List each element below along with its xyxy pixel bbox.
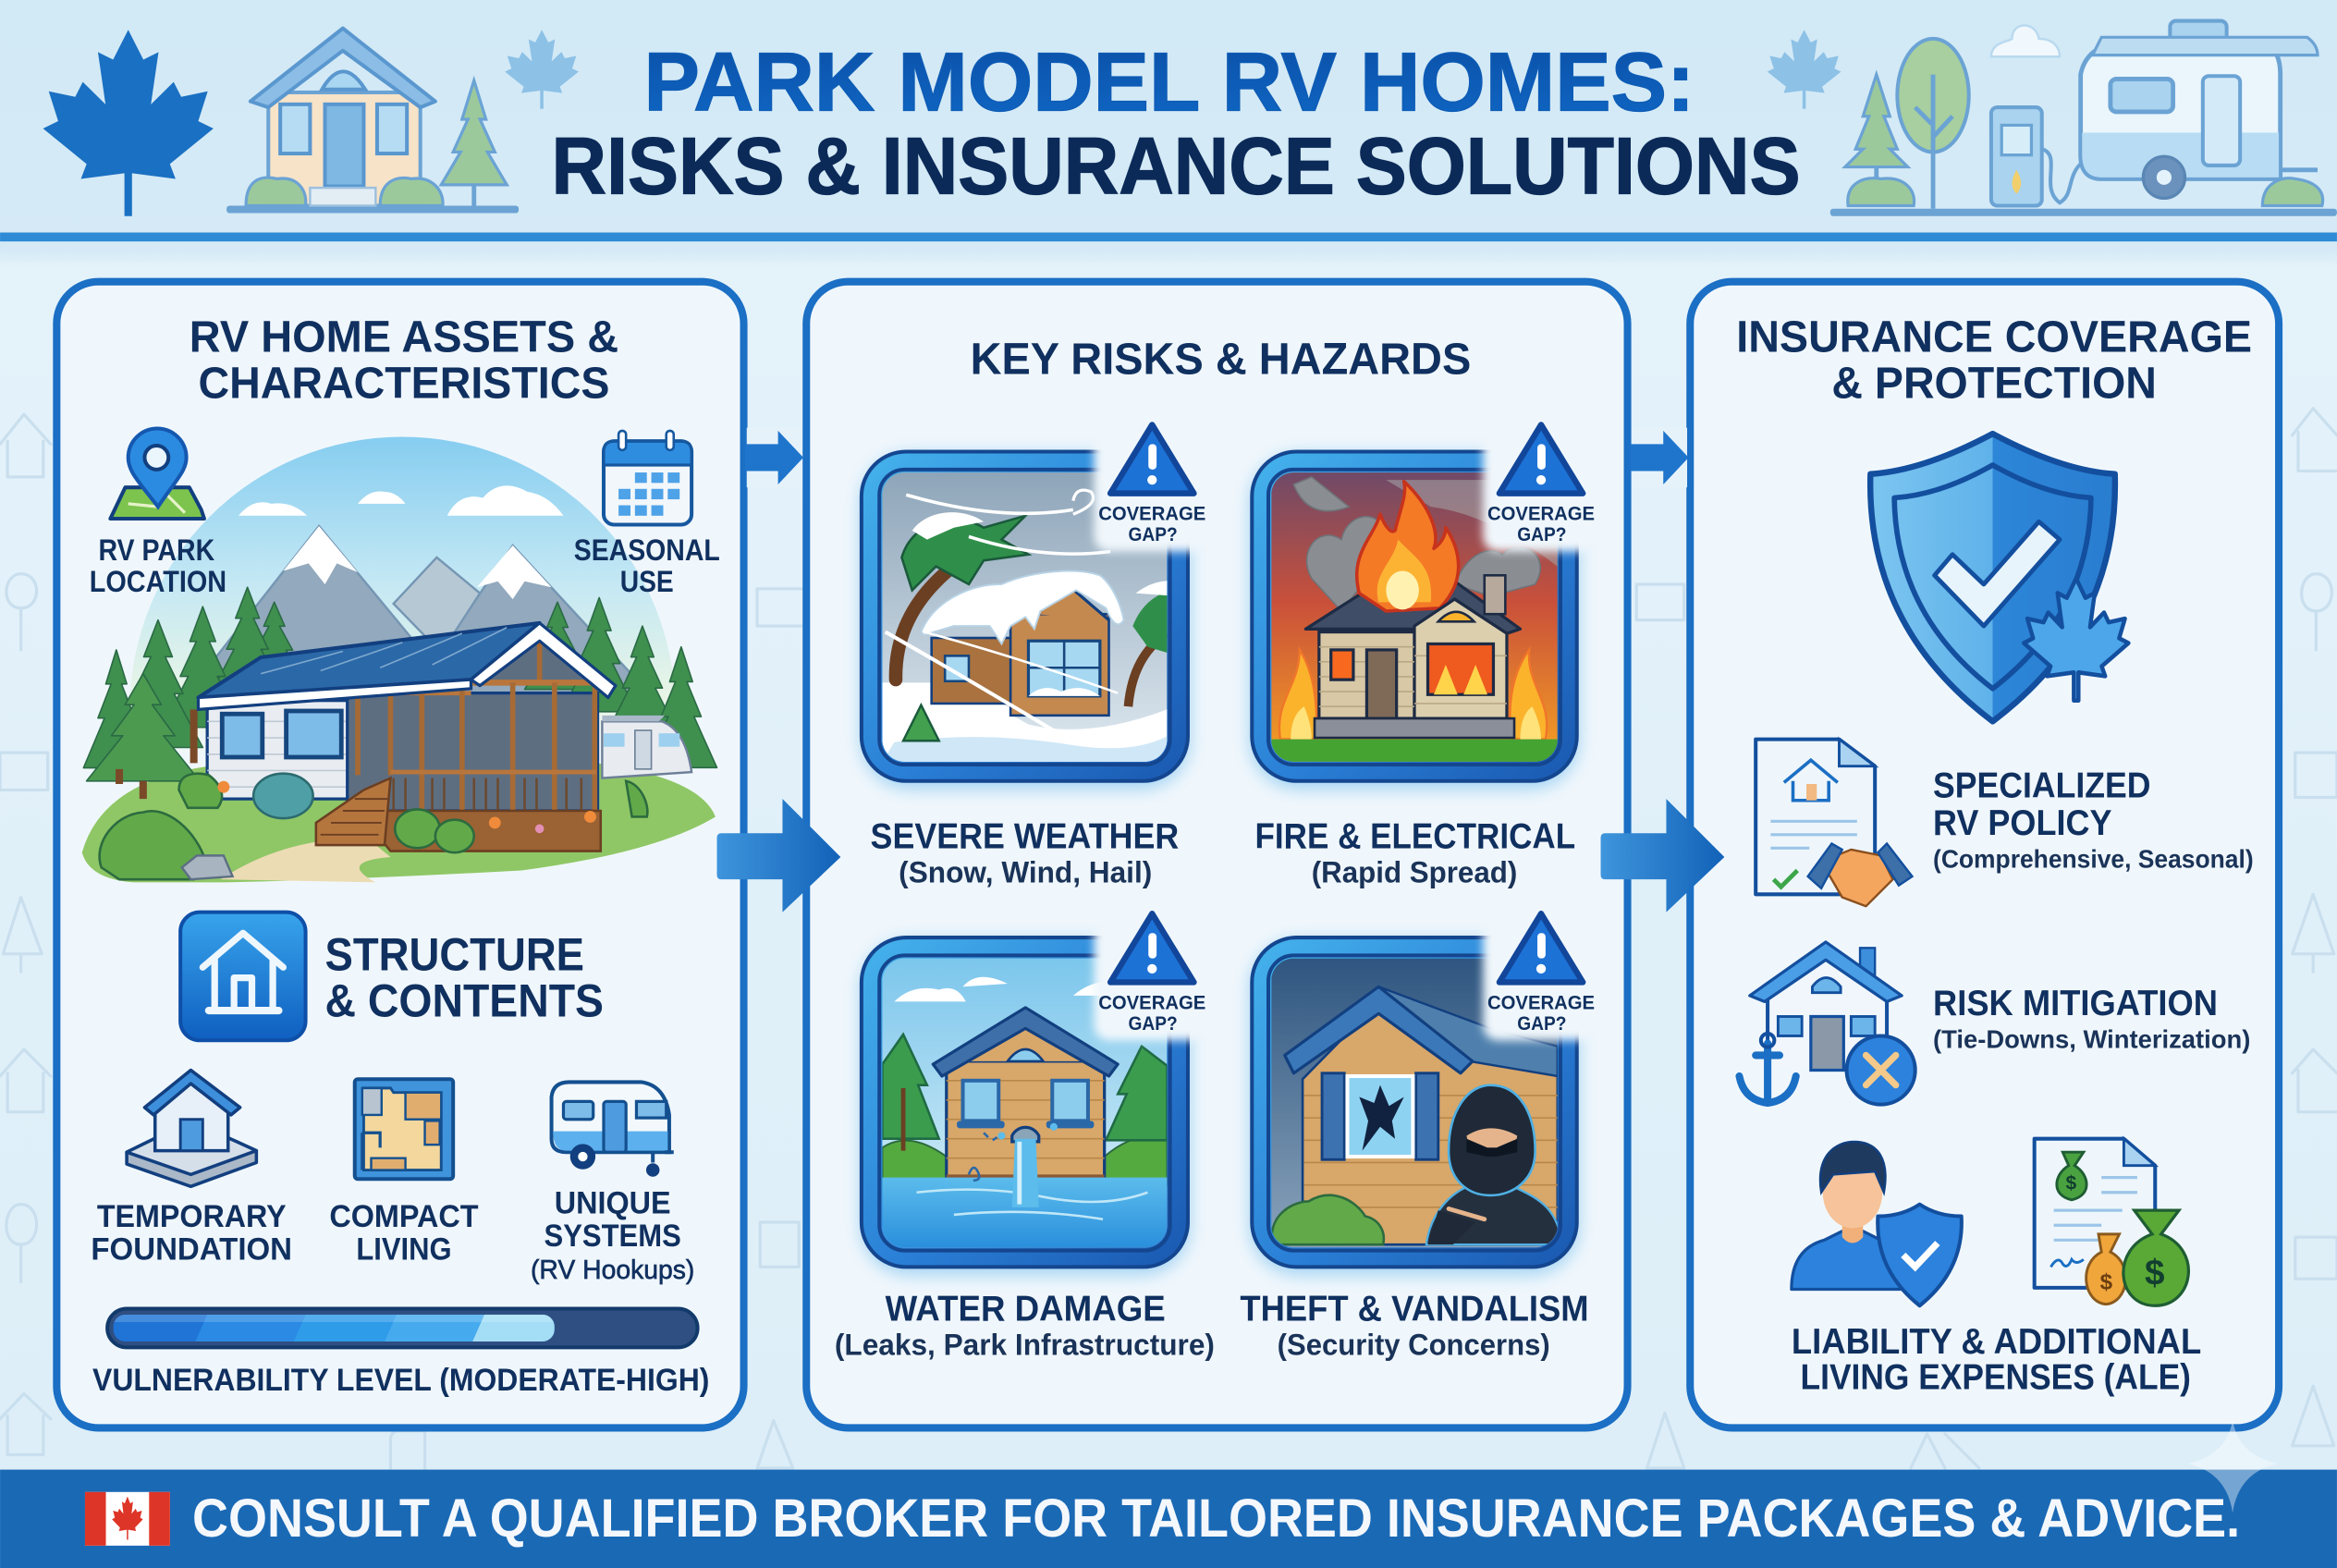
text: liability and ALE: LIABILITY & ADDITIONAL — [1792, 1322, 2201, 1362]
label: temporary foundation: FOUNDATION — [91, 1231, 292, 1267]
label: compact living — [329, 1199, 479, 1267]
porch — [348, 693, 598, 811]
label: water damage: WATER DAMAGE — [886, 1289, 1166, 1329]
label: temporary foundation: TEMPORARY — [97, 1199, 287, 1234]
label: theft and vandalism: (Security Concerns) — [1278, 1328, 1550, 1361]
callout: coverage gap: COVERAGE — [1098, 504, 1205, 525]
heading: key risks: KEY RISKS & HAZARDS — [971, 335, 1471, 385]
icon: large maple leaf — [43, 30, 214, 216]
heading: RV home assets — [190, 312, 618, 408]
arrow: small top left — [745, 428, 803, 487]
label: RV park location — [90, 533, 226, 598]
roof — [198, 623, 540, 697]
vulnerability level bar — [107, 1308, 698, 1347]
callout: coverage gap — [1483, 424, 1597, 552]
label: seasonal use: USE — [620, 565, 674, 598]
callout: coverage gap: GAP? — [1128, 524, 1178, 545]
footer banner — [0, 1470, 2337, 1568]
label: water damage — [835, 1289, 1215, 1361]
icon: sparkle — [2188, 1420, 2277, 1513]
text: liability and ALE: LIVING EXPENSES (ALE) — [1801, 1358, 2191, 1398]
callout: coverage gap: GAP? — [1517, 1013, 1566, 1035]
label: unique systems: UNIQUE — [555, 1185, 671, 1220]
card: severe weather — [862, 424, 1207, 789]
icon: small maple leaf left — [505, 30, 579, 109]
panel: key risks and hazards — [806, 282, 1628, 1427]
heading: insurance coverage: & PROTECTION — [1831, 358, 2157, 408]
label: seasonal use — [574, 533, 720, 598]
header banner — [43, 21, 2337, 216]
call to action: CONSULT A QUALIFIED BROKER FOR TAILORED INSURANCE PACKAGES & ADVICE. — [192, 1488, 2240, 1549]
text: structure and contents: & CONTENTS — [325, 974, 604, 1026]
text: liability and ALE — [1792, 1322, 2201, 1398]
bushes and flowers — [100, 774, 647, 879]
heading: insurance coverage: INSURANCE COVERAGE — [1736, 312, 2252, 361]
illustration: park model home in landscape — [82, 436, 717, 882]
callout: coverage gap — [1483, 913, 1597, 1040]
text: risk mitigation — [1933, 984, 2250, 1053]
callout: coverage gap: GAP? — [1128, 1013, 1178, 1035]
label: severe weather: SEVERE WEATHER — [871, 816, 1179, 856]
arrow: large middle left — [717, 799, 840, 913]
callout: coverage gap: COVERAGE — [1098, 992, 1205, 1013]
label: fire and electrical: FIRE & ELECTRICAL — [1255, 816, 1575, 856]
label: fire and electrical — [1255, 816, 1575, 888]
arrow: small top right — [1631, 428, 1689, 487]
heading: RV home assets: CHARACTERISTICS — [198, 358, 609, 408]
callout: coverage gap: GAP? — [1517, 524, 1566, 545]
background pattern — [0, 409, 2337, 1468]
label: compact living: COMPACT — [329, 1199, 479, 1234]
icon: additional living expenses money: $ — [2100, 1270, 2113, 1295]
label: vulnerability level: VULNERABILITY LEVEL (MODERATE-HIGH) — [92, 1363, 709, 1398]
icon: calendar — [604, 431, 691, 524]
label: theft and vandalism: THEFT & VANDALISM — [1240, 1289, 1589, 1329]
title — [552, 35, 1801, 212]
icon: shield with check and maple leaf — [1870, 434, 2128, 721]
icon: RV policy document and handshake — [1756, 740, 1912, 906]
icon: structure house tile — [180, 913, 306, 1040]
icon: canadian flag — [85, 1492, 170, 1546]
text: specialized RV policy: SPECIALIZED — [1933, 766, 2150, 806]
icon: map pin — [110, 428, 204, 519]
heading: insurance coverage — [1736, 312, 2252, 408]
icon: header trees, fuel pump and trailer — [1830, 21, 2337, 216]
panel: insurance coverage and protection — [1690, 282, 2279, 1427]
callout: coverage gap: COVERAGE — [1487, 504, 1595, 525]
callout: coverage gap — [1094, 424, 1207, 552]
card: theft and vandalism — [1251, 913, 1597, 1274]
label: unique systems: (RV Hookups) — [531, 1256, 694, 1285]
text: risk mitigation: (Tie-Downs, Winterization) — [1933, 1024, 2250, 1053]
text: structure and contents — [325, 929, 604, 1026]
text: specialized RV policy — [1933, 766, 2254, 873]
icon: unique RV systems — [552, 1082, 674, 1177]
callout: coverage gap: COVERAGE — [1487, 992, 1595, 1013]
title: PARK MODEL RV HOMES: — [644, 35, 1695, 129]
icon: risk mitigation house — [1739, 942, 1915, 1105]
icon: small maple leaf right — [1768, 30, 1841, 109]
label: severe weather: (Snow, Wind, Hail) — [899, 855, 1152, 888]
card: fire and electrical — [1251, 424, 1597, 789]
header divider — [0, 232, 2337, 241]
label: RV park location: RV PARK — [98, 533, 214, 567]
label: theft and vandalism — [1240, 1289, 1589, 1361]
callout: coverage gap — [1094, 913, 1207, 1040]
arrow: large middle right — [1601, 799, 1724, 913]
card: water damage — [862, 913, 1207, 1274]
panel: RV home assets and characteristics — [56, 282, 744, 1427]
siding — [207, 701, 352, 799]
stairs — [316, 778, 390, 845]
label: compact living: LIVING — [356, 1231, 452, 1267]
icon: temporary foundation — [127, 1071, 256, 1186]
text: specialized RV policy: (Comprehensive, Seasonal) — [1933, 844, 2254, 873]
title: RISKS & INSURANCE SOLUTIONS — [552, 122, 1801, 212]
pine trees — [83, 587, 717, 781]
label: unique systems — [531, 1185, 694, 1285]
icon: person with shield — [1792, 1142, 1962, 1305]
icon: additional living expenses money — [2035, 1139, 2188, 1305]
heading: RV home assets: RV HOME ASSETS & — [190, 312, 618, 361]
icon: additional living expenses money: $ — [2145, 1254, 2165, 1293]
label: seasonal use: SEASONAL — [574, 533, 720, 567]
icon: header house — [226, 29, 519, 214]
text: structure and contents: STRUCTURE — [325, 929, 584, 981]
label: RV park location: LOCATION — [90, 565, 226, 598]
text: risk mitigation: RISK MITIGATION — [1933, 984, 2218, 1023]
rv behind home — [602, 716, 691, 778]
icon: compact living floorplan — [355, 1079, 453, 1179]
text: specialized RV policy: RV POLICY — [1933, 803, 2112, 843]
label: unique systems: SYSTEMS — [544, 1219, 681, 1254]
label: temporary foundation — [91, 1199, 292, 1267]
label: severe weather — [871, 816, 1179, 888]
icon: additional living expenses money: $ — [2066, 1173, 2077, 1194]
label: fire and electrical: (Rapid Spread) — [1312, 855, 1517, 888]
label: water damage: (Leaks, Park Infrastructure) — [835, 1328, 1215, 1361]
